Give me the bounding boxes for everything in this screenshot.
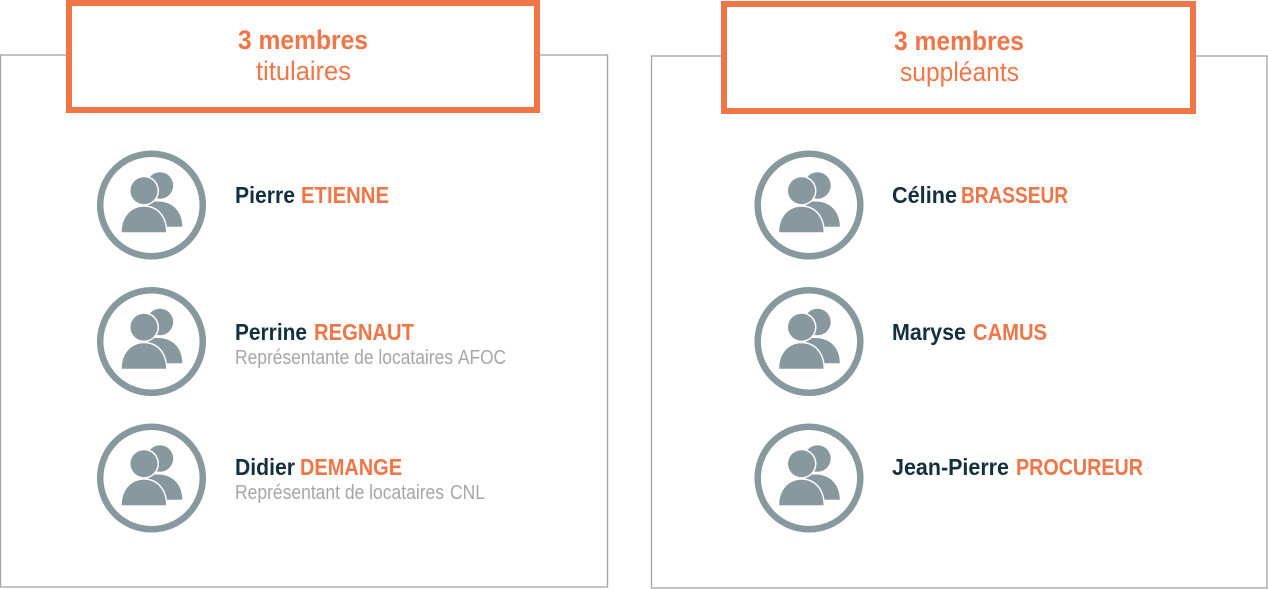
member: Jean-Pierre PROCUREUR: Jean-Pierre [892,454,1009,480]
icon: person 3 [100,427,203,529]
panel: suppléants [652,4,1267,588]
member: Pierre ETIENNE: Pierre [235,182,295,208]
heading: 3 membres suppléants: suppléants [900,57,1019,87]
member: Didier DEMANGE: CNL [450,481,485,504]
icon: person 6 [758,427,860,529]
icon: person 5 [758,290,860,393]
panel: titulaires [0,3,608,587]
member: Perrine REGNAUT: AFOC [458,346,506,369]
member: Perrine REGNAUT: Perrine [235,319,307,345]
heading: 3 membres titulaires: titulaires [256,56,351,86]
member: Pierre ETIENNE: ETIENNE [301,182,389,208]
member: Maryse CAMUS: CAMUS [973,319,1047,345]
member: Perrine REGNAUT: REGNAUT [314,319,414,345]
member: Maryse CAMUS: Maryse [892,319,966,345]
member: Maryse CAMUS [892,319,1047,345]
member: Jean-Pierre PROCUREUR: PROCUREUR [1016,454,1143,480]
icon: person 2 [100,290,203,393]
member: Didier DEMANGE: Didier [235,454,295,480]
member: Jean-Pierre PROCUREUR [892,454,1143,480]
member: Perrine REGNAUT [235,319,506,369]
member: Didier DEMANGE [235,454,485,504]
icon: person 4 [758,154,860,256]
heading: 3 membres suppléants [724,4,1193,111]
heading: 3 membres suppléants: 3 membres [894,26,1024,56]
heading: 3 membres titulaires [69,3,537,110]
member: Didier DEMANGE: DEMANGE [300,454,402,480]
heading: 3 membres titulaires: 3 membres [238,25,368,55]
member: Perrine REGNAUT: Représentante de locataires [235,346,453,369]
member: Céline BRASSEUR [892,182,1068,208]
member: Céline BRASSEUR: BRASSEUR [961,182,1068,208]
icon: person 1 [100,154,203,256]
member: Didier DEMANGE: Représentant de locataires [235,481,444,504]
member: Céline BRASSEUR: Céline [892,182,957,208]
member: Pierre ETIENNE [235,182,389,208]
